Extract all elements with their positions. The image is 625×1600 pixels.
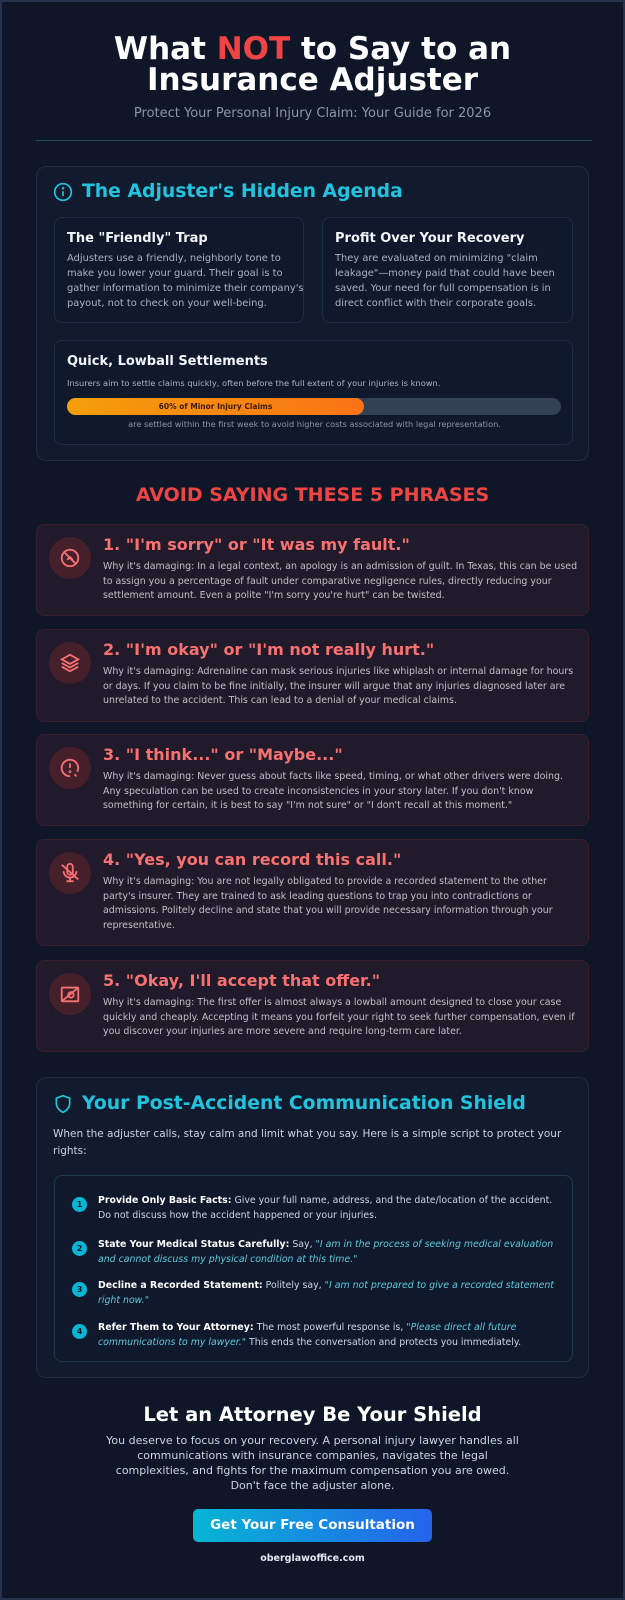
script box: and cannot discuss my physical condition at this time." bbox=[98, 1254, 357, 1265]
card: friendly trap: make you lower your guard. Their goal is to bbox=[67, 268, 283, 279]
script box: 1 bbox=[77, 1200, 82, 1209]
phrase 1: Why it's damaging: In a legal context, an apology is an admission of guilt. In Texas, this can be used bbox=[103, 561, 577, 572]
footer text bbox=[106, 1434, 519, 1492]
script box: 3 bbox=[77, 1285, 82, 1294]
subtitle: Protect Your Personal Injury Claim: Your Guide for 2026 bbox=[134, 106, 491, 121]
footer text: complexities, and fights for the maximum compensation you are owed. bbox=[116, 1464, 509, 1477]
panel: hidden agenda bbox=[36, 166, 589, 461]
phrase 3 bbox=[36, 734, 589, 826]
card: friendly trap: Adjusters use a friendly, neighborly tone to bbox=[67, 253, 281, 264]
button: consultation bbox=[193, 1509, 432, 1542]
script box: State Your Medical Status Carefully: Say, "I am in the process of seeking medical evaluation bbox=[98, 1239, 553, 1250]
phrase 3: Why it's damaging: Never guess about facts like speed, timing, or what other drivers were doing. bbox=[103, 771, 563, 782]
phrase 4: 4. "Yes, you can record this call." bbox=[103, 850, 401, 869]
phrase 4 bbox=[36, 839, 589, 946]
phrase 4: party's insurer. They are trained to ask leading questions to trap you into contradictions or bbox=[103, 890, 532, 902]
icon: question bbox=[49, 747, 91, 789]
card: friendly trap: gather information to minimize their company's bbox=[67, 283, 304, 294]
phrase 5: Why it's damaging: The first offer is almost always a lowball amount designed to close your case bbox=[103, 997, 561, 1008]
card: profit over recovery: Profit Over Your Recovery bbox=[335, 231, 525, 246]
script box: Provide Only Basic Facts: Give your full name, address, and the date/location of the accident. bbox=[98, 1195, 552, 1206]
script box: Refer Them to Your Attorney: The most powerful response is, "Please direct all future bbox=[98, 1322, 516, 1333]
icon: layers bbox=[49, 642, 91, 684]
phrase 5: 5. "Okay, I'll accept that offer." bbox=[103, 971, 380, 990]
script box: 4 bbox=[77, 1327, 82, 1336]
phrase 1: to assign you a percentage of fault under comparative negligence rules, directly reducing your bbox=[103, 576, 552, 586]
phrase 5 bbox=[36, 960, 589, 1052]
script box bbox=[54, 1175, 573, 1362]
title: Insurance Adjuster bbox=[147, 62, 478, 98]
footer heading: Let an Attorney Be Your Shield bbox=[143, 1403, 482, 1426]
footer text: Don't face the adjuster alone. bbox=[231, 1479, 394, 1492]
footer text: communications with insurance companies, navigates the legal bbox=[137, 1449, 488, 1462]
phrase 1: settlement amount. Even a polite "I'm sorry you're hurt" can be twisted. bbox=[103, 590, 445, 601]
intro text: rights: bbox=[53, 1145, 87, 1157]
step 1 bbox=[72, 1195, 552, 1221]
card: lowball settlements: are settled within the first week to avoid higher costs associated with legal representation. bbox=[128, 419, 501, 429]
card: profit over recovery: They are evaluated on minimizing "claim bbox=[335, 253, 538, 264]
phrase 2: or days. If you claim to be fine initially, the insurer will argue that any injuries diagnosed later are bbox=[103, 680, 565, 692]
script box: right now." bbox=[98, 1295, 149, 1306]
phrase 2: unrelated to the accident. This can lead to a denial of your medical claims. bbox=[103, 695, 457, 706]
progress bar: 60% of Minor Injury Claims bbox=[159, 402, 272, 411]
intro text: When the adjuster calls, stay calm and limit what you say. Here is a simple script to protect your bbox=[53, 1128, 561, 1140]
phrase 3: something for certain, it is best to say "I'm not sure" or "I don't recall at this moment." bbox=[103, 800, 512, 811]
heading: hidden agenda: The Adjuster's Hidden Agenda bbox=[82, 181, 403, 202]
card: profit over recovery: direct conflict with their corporate goals. bbox=[335, 298, 536, 309]
panel: communication shield bbox=[36, 1077, 589, 1378]
card: profit over recovery: saved. Your need for full compensation is in bbox=[335, 283, 551, 294]
step 2 bbox=[72, 1239, 553, 1265]
website: oberglawoffice.com bbox=[260, 1553, 365, 1564]
heading: avoid phrases: AVOID SAYING THESE 5 PHRASES bbox=[136, 484, 489, 506]
icon: offer bbox=[49, 973, 91, 1015]
card: lowball settlements: Quick, Lowball Settlements bbox=[67, 354, 268, 369]
phrase 4: representative. bbox=[103, 920, 175, 930]
heading: shield: Your Post-Accident Communication Shield bbox=[82, 1093, 526, 1114]
phrase 3: Any speculation can be used to create inconsistencies in your story later. If you don't know bbox=[103, 786, 533, 796]
phrase 2: 2. "I'm okay" or "I'm not really hurt." bbox=[103, 640, 434, 659]
script box: Decline a Recorded Statement: Politely say, "I am not prepared to give a recorded statement bbox=[98, 1280, 554, 1291]
icon: mic off bbox=[49, 852, 91, 894]
phrase 1: 1. "I'm sorry" or "It was my fault." bbox=[103, 535, 410, 554]
card: lowball settlements bbox=[54, 340, 573, 445]
script box: communications to my lawyer." This ends the conversation and protects you immediately. bbox=[98, 1337, 521, 1348]
phrase 4: admissions. Politely decline and state that you will provide necessary information through your bbox=[103, 905, 553, 916]
card: lowball settlements: Insurers aim to settle claims quickly, often before the full extent of your injuries is known. bbox=[67, 378, 440, 388]
phrase 2 bbox=[36, 629, 589, 722]
phrase 1 bbox=[36, 524, 589, 616]
script box: 2 bbox=[77, 1244, 82, 1253]
phrase 5: you discover your injuries are more severe and require long-term care later. bbox=[103, 1026, 462, 1037]
script box: Do not discuss how the accident happened or your injuries. bbox=[98, 1210, 377, 1221]
footer text: You deserve to focus on your recovery. A personal injury lawyer handles all bbox=[106, 1434, 519, 1447]
card: friendly trap bbox=[54, 217, 304, 323]
phrase 2: Why it's damaging: Adrenaline can mask serious injuries like whiplash or internal damage for hours bbox=[103, 666, 573, 677]
phrase 3: 3. "I think..." or "Maybe..." bbox=[103, 745, 343, 764]
phrase 5: quickly and cheaply. Accepting it means you forfeit your right to seek further compensation, even if bbox=[103, 1012, 575, 1022]
step 3 bbox=[72, 1280, 554, 1306]
intro text bbox=[53, 1128, 562, 1157]
card: friendly trap: payout, not to check on your well-being. bbox=[67, 298, 267, 309]
phrase 4: Why it's damaging: You are not legally obligated to provide a recorded statement to the other bbox=[103, 876, 547, 887]
step 4 bbox=[72, 1322, 521, 1348]
card: profit over recovery: leakage"—money paid that could have been bbox=[335, 268, 555, 279]
icon: no sorry bbox=[49, 537, 91, 579]
button: consultation: Get Your Free Consultation bbox=[210, 1517, 415, 1533]
progress bar bbox=[67, 398, 561, 415]
card: profit over recovery bbox=[322, 217, 573, 323]
title: What NOT to Say to an bbox=[114, 31, 511, 67]
card: friendly trap: The "Friendly" Trap bbox=[67, 231, 208, 246]
title bbox=[114, 31, 511, 98]
